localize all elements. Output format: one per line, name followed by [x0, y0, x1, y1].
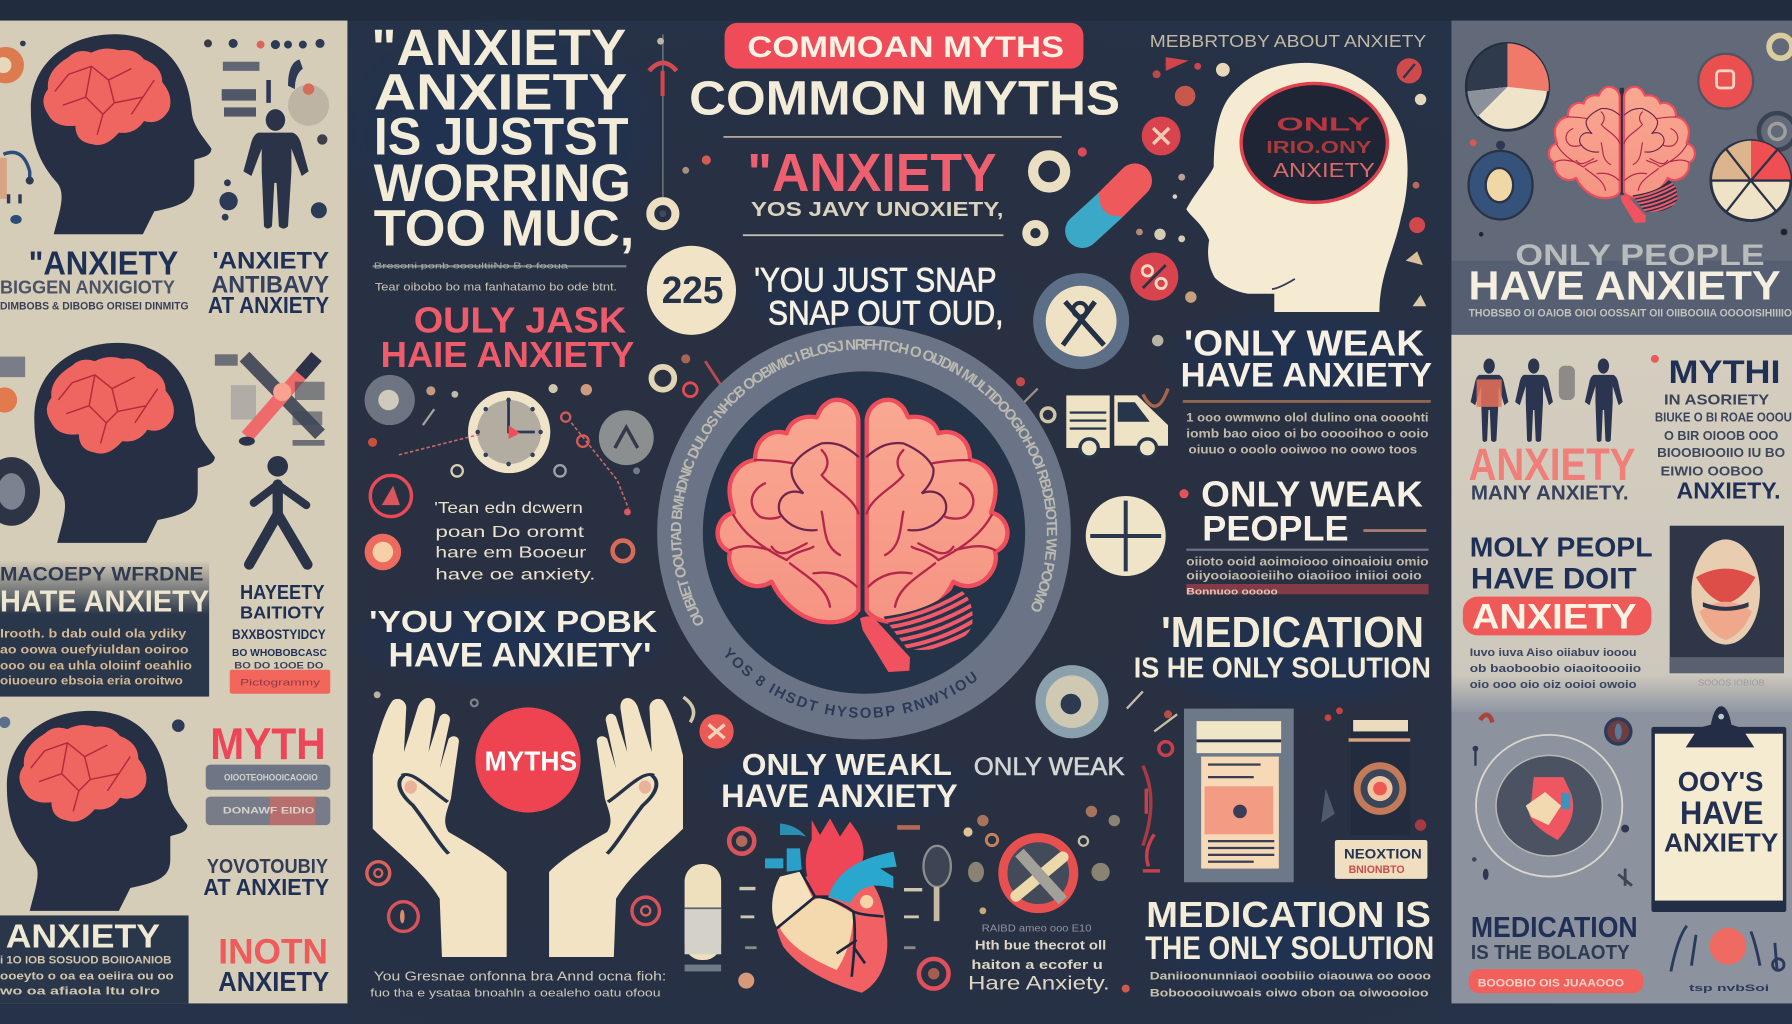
- icon: thread medallion: [649, 34, 677, 226]
- heading: medication is the only solution 2: [1145, 894, 1434, 966]
- heading: only weak people: PEOPLE: [1202, 509, 1349, 549]
- text: you can decern: hare em Booeur: [435, 545, 587, 562]
- heading: only weak small: ONLY WEAK: [974, 753, 1125, 781]
- caption: bottom of hands: [370, 970, 666, 1000]
- text: you at anxiety: [203, 855, 329, 900]
- text: anxiety block 1: [0, 245, 189, 313]
- text: mythi block: O BIR OIOOB OOO: [1664, 429, 1779, 443]
- heading: medication is the only solution 1: IS HE ONLY SOLUTION: [1134, 653, 1431, 685]
- section: beige gradient to gray: [1451, 335, 1792, 1003]
- box: anxiety bottom: i 1O IOB SOSUOD BOIIOANIOB: [0, 954, 171, 966]
- heading: only weak have anxiety centre: ONLY WEAKL: [742, 747, 952, 782]
- icon: cream head with dark brain: [1186, 63, 1408, 312]
- box: hate anxiety: ao oowa ouefyiuldan ooiroo: [0, 643, 189, 657]
- text: mythi block: MYTHI: [1669, 354, 1781, 390]
- bars: grey labels: [206, 765, 330, 825]
- panel: medication leaflet: [1184, 709, 1294, 882]
- panel: right column: [1451, 21, 1792, 1003]
- text: not anxiety: INOTN: [218, 931, 328, 971]
- text: anxiety red gradient: MANY ANXIETY.: [1471, 481, 1629, 504]
- caption: under headline: Tear oibobo bo ma fanhatamo bo ode btnt.: [375, 281, 617, 293]
- ring lettering: YOS 8 IHSDT HYSOBP RNWYIOU: [725, 647, 976, 718]
- caption: under headline: [373, 262, 626, 293]
- heading: medication is the only solution 1: [1134, 609, 1431, 685]
- heading: you just snap: [754, 261, 1003, 333]
- text: anxiety block 1: DIMBOBS & DIBOBG ORISEI DINMITG: [0, 301, 189, 313]
- text: myth: MYTH: [210, 720, 326, 769]
- tag: red label: [230, 661, 330, 694]
- icon: blue medal: [1469, 139, 1787, 237]
- headline: red only ask: [381, 300, 634, 375]
- text: have anxiety caption: [968, 923, 1110, 995]
- text: moly people: HAVE DOIT: [1471, 563, 1637, 596]
- text: moly people: [1470, 532, 1653, 596]
- text: medication is the solution: [1471, 912, 1638, 964]
- caption: moly people: ob baoboobio oiaoitoooiio: [1470, 663, 1641, 675]
- heading: medication is the only solution 1: 'MEDICATION: [1161, 609, 1424, 657]
- heading: only people: ONLY PEOPLE: [1515, 239, 1765, 272]
- section: gray top: [1451, 21, 1792, 335]
- headline: anxiety is just worrying too much: "ANXIETY: [371, 18, 626, 76]
- icon: medical capsule: [685, 864, 721, 971]
- text: anxiety block 2: 'ANXIETY: [213, 248, 329, 275]
- icons: top right of left column: [204, 39, 329, 221]
- headline: anxiety is just worrying too much: TOO MUC,: [374, 199, 634, 257]
- text: medication is the solution: IS THE BOLAOTY: [1471, 941, 1630, 964]
- text: not anxiety: [218, 931, 329, 997]
- text: myth column 1: BAITIOTY: [240, 602, 325, 622]
- caption: moly people: oio ooo oio oiz ooioi owoio: [1470, 679, 1637, 691]
- divider: [723, 136, 1062, 138]
- heading: only weak have anxiety centre: HAVE ANXIETY: [721, 778, 958, 814]
- icon: bottom right cluster: tsp nvbSoi: [1689, 983, 1769, 993]
- box: anxiety bottom: wo oa afiaola ltu olro: [0, 985, 160, 997]
- icon: bottom right cluster: [1671, 926, 1784, 993]
- heading: have anxiety: HAVE ANXIETY: [1469, 262, 1781, 308]
- text: anxiety red gradient: ANXIETY: [1469, 439, 1635, 490]
- text: myth column 1: BXXBOSTYIDCY: [232, 627, 326, 643]
- text: you can decern: [434, 500, 595, 583]
- label: medication card: BNIONBTO: [1349, 864, 1405, 876]
- caption: moly people: [1470, 647, 1641, 691]
- icon: clipboard: ANXIETY: [1664, 827, 1779, 857]
- text: myth column 1: [232, 581, 327, 659]
- text: anxiety block 2: [208, 248, 329, 318]
- text: you can decern: 'Tean edn dcwern: [434, 500, 583, 517]
- head with brain 1: [31, 34, 211, 234]
- label: medication card: [1335, 840, 1427, 879]
- navy glows behind headlines: [331, 11, 1454, 1006]
- icon: delivery truck: [1066, 395, 1168, 457]
- text: medication is the solution: MEDICATION: [1471, 912, 1638, 944]
- icons: around heart: [729, 825, 951, 989]
- icon: red badge: [1698, 54, 1753, 109]
- icon: bottle with target: [1349, 720, 1410, 835]
- icon: anatomical heart: [765, 818, 897, 993]
- box: hate anxiety: MACOEPY WFRDNE: [0, 564, 203, 586]
- figure: walking person: [249, 456, 307, 565]
- heading: memory about anxiety: MEBBRTOBY ABOUT ANXIETY: [1150, 31, 1427, 51]
- icon: cupped hands with myths: [373, 698, 683, 957]
- caption block: medication: Daniioonunniaoi ooobiiio oiaouwa oo oooo: [1150, 970, 1431, 982]
- box: anxiety bottom: [0, 915, 189, 1003]
- headline: you have anxiety: 'YOU YOIX POBK: [369, 604, 657, 639]
- text: you can decern: poan Do oromt: [435, 524, 585, 541]
- headline: you have anxiety: [369, 604, 657, 674]
- badge: 225: [647, 246, 736, 335]
- text: mythi block: IN ASORIETY: [1664, 393, 1769, 409]
- text: anxiety block 1: BIGGEN ANXIGIOTY: [0, 277, 175, 298]
- caption block: only weak: iomb bao oioo oi bo ooooihoo o ooio: [1186, 427, 1429, 441]
- icon: small rings top right: [1759, 35, 1792, 150]
- caption block: people: oiiyooiaooieiiho oiaoiioo iniioi ooio: [1186, 568, 1422, 582]
- text: mythi block: EIWIO OOBOO: [1661, 464, 1764, 478]
- text: mythi block: ANXIETY.: [1677, 477, 1781, 503]
- caption block: people: [1186, 549, 1429, 596]
- text: anxiety block 2: ANTIBAVY: [211, 272, 329, 299]
- icon: clipboard: [1651, 706, 1786, 912]
- box: anxiety bottom: ANXIETY: [6, 918, 160, 955]
- heading: only weak have anxiety centre: [721, 747, 958, 814]
- tag: red label: BO DO 1OOE DO: [234, 661, 323, 671]
- pill: bottom red: [1469, 969, 1643, 993]
- text: you at anxiety: AT ANXIETY: [203, 874, 329, 900]
- picture: dark frame with egg: SOOOS IOBIOB: [1698, 679, 1765, 688]
- box: hate anxiety: oiuoeuro ebsoia eria oroitwo: [0, 674, 183, 688]
- text: anxiety red gradient: [1469, 439, 1635, 504]
- head with brain 2: [34, 343, 215, 543]
- icons: around no sign: [963, 789, 1160, 993]
- text: anxiety block 1: "ANXIETY: [29, 245, 178, 282]
- caption block: medication: Bobooooiuwoais oiwo obon oa oiwoooioo: [1150, 988, 1429, 1000]
- caption: bottom of hands: You Gresnae onfonna bra Annd ocna fioh:: [374, 970, 666, 984]
- headline: anxiety is just worrying too much: [371, 18, 634, 257]
- title: common myths: COMMON MYTHS: [689, 72, 1120, 125]
- headline: red only ask: HAIE ANXIETY: [381, 334, 634, 375]
- heading: only weak have anxiety right: [1181, 322, 1432, 394]
- box: hate anxiety: ooo ou ea uhla oloiinf oeahlio: [0, 659, 192, 673]
- icon: gray medallion: [1035, 665, 1177, 738]
- icons: around head: [1153, 57, 1426, 306]
- bars: grey labels: DONAWF EIDIO: [223, 806, 314, 816]
- pill: header label: COMMOAN MYTHS: [747, 31, 1064, 64]
- panel: left beige column: [0, 21, 347, 1003]
- caption: bottom of hands: fuo tha e ysataa bnoahln a oealeho oatu ofoou: [370, 988, 661, 1000]
- caption block: only weak: oiuuo o ooolo ooiwoo no oowo toos: [1189, 443, 1417, 457]
- box: hate anxiety: [0, 560, 210, 697]
- box: hate anxiety: Irooth. b dab ould ola ydiky: [0, 627, 187, 641]
- text: myth column 1: BO WHOBOBCASC: [232, 648, 327, 659]
- headline: anxiety is just worrying too much: ANXIETY: [374, 63, 627, 121]
- ring: around brain: [657, 326, 1071, 740]
- divider: [743, 234, 1003, 236]
- box: anxiety bottom: ooeyto o oa ea oeiira ou oo: [0, 970, 174, 982]
- icon: cream head with dark brain: ANXIETY: [1273, 159, 1375, 182]
- text: mythi block: [1651, 354, 1792, 503]
- icons: around center top: [651, 117, 1185, 422]
- icon: crossed X: [215, 354, 325, 446]
- ring lettering: OUBIET OOUTAD BMHDNIC DULOS NHCB OOBIMIC I BLOSJ NRFHTCH O OIJDIN MULTIDOOGIOHOOI RBDEIOTE WE POOMO: [670, 339, 1058, 626]
- headline: you have anxiety: HAVE ANXIETY': [389, 636, 651, 674]
- icon: cream head with dark brain: IRIO.ONY: [1266, 137, 1372, 157]
- text: have anxiety caption: RAIBD ameo ooo E10: [982, 923, 1092, 934]
- headline: anxiety is just worrying too much: WORRING: [374, 154, 631, 213]
- illustration: brain in right column: [1549, 87, 1695, 223]
- caption: under headline: Bresoni ponb oooultiiNo B o fooua: [374, 262, 569, 271]
- heading: only weak have anxiety right: HAVE ANXIETY: [1181, 356, 1432, 394]
- icon: crossed tool badge: [1033, 273, 1129, 369]
- heading: only weak people: ONLY WEAK: [1201, 473, 1423, 514]
- caption block: people: Bonnuoo ooooo: [1186, 586, 1278, 596]
- text: have anxiety caption: haiton a ecofer u: [971, 958, 1103, 972]
- text: you at anxiety: YOVOTOUBIY: [207, 855, 328, 878]
- pill: header label: [725, 23, 1083, 69]
- caption block: people: oiioto ooid aoimoiooo oinoaioiu omio: [1186, 555, 1429, 569]
- top dark strip: [0, 0, 1792, 21]
- tag: red label: Pictogrammy: [240, 678, 321, 688]
- icons: rings around hands: [367, 691, 734, 931]
- icon: heart in ring: [1476, 735, 1622, 877]
- text: myth column 1: HAYEETY: [240, 581, 325, 604]
- text: have anxiety caption: Hare Anxiety.: [968, 973, 1110, 995]
- text: anxiety block 2: AT ANXIETY: [208, 292, 329, 318]
- headline: anxiety is just worrying too much: IS JUSTST: [374, 107, 629, 166]
- icons: around clock: [365, 375, 654, 570]
- caption: moly people: Iuvo iuva Aiso oiiabuv iooou: [1470, 647, 1637, 659]
- icon: clipboard: HAVE: [1680, 795, 1763, 831]
- icons: left edge of left column: [0, 41, 185, 732]
- caption block: medication: [1150, 970, 1431, 1000]
- text: moly people: MOLY PEOPL: [1470, 532, 1653, 563]
- heading: red anxiety: "ANXIETY: [747, 143, 997, 203]
- heading: only weak have anxiety right: 'ONLY WEAK: [1184, 322, 1425, 363]
- label: medication card: NEOXTION: [1344, 846, 1422, 861]
- caption block: only weak: 1 ooo owmwno olol dulino ona oooohti: [1186, 411, 1429, 425]
- pill: bottom red: BOOOBIO OIS JUAAOOO: [1478, 977, 1624, 989]
- heading: you just snap: SNAP OUT OUD,: [768, 295, 1003, 333]
- figure: standing person: [243, 109, 309, 229]
- icon: no bandage sign: [1003, 838, 1074, 909]
- pill: anxiety: ANXIETY: [1472, 597, 1637, 637]
- icons: around heart ring: [1472, 715, 1632, 886]
- chart: pie 1: [1466, 43, 1549, 130]
- subheading: you just anxiety: YOS JAVY UNOXIETY,: [751, 198, 1003, 221]
- icon: clipboard: OOY'S: [1678, 766, 1763, 797]
- headline: red only ask: OULY JASK: [414, 300, 627, 341]
- caption block: only weak: [1183, 400, 1431, 457]
- heading: medication is the only solution 2: MEDICATION IS: [1146, 894, 1431, 935]
- text: you can decern: have oe anxiety.: [435, 566, 595, 583]
- icons: medication decorations: [1143, 707, 1426, 846]
- icon: plus circle: [1086, 496, 1166, 576]
- icon: capsule: [1082, 181, 1135, 231]
- bars: grey labels: OIOOTEOHOOICAOOIO: [224, 773, 318, 783]
- heading: medication is the only solution 2: THE ONLY SOLUTION: [1145, 930, 1434, 966]
- box: hate anxiety: HATE ANXIETY: [0, 583, 210, 618]
- icon: clock: [468, 391, 550, 473]
- icon: cream head with dark brain: ONLY: [1277, 113, 1370, 134]
- badge: 225: 225: [662, 269, 723, 311]
- text: mythi block: BIOOBIOOIIO IU BO: [1657, 446, 1785, 460]
- picture: dark frame with egg: [1670, 526, 1784, 688]
- icon: cupped hands with myths: MYTHS: [485, 745, 577, 776]
- heading: you just snap: 'YOU JUST SNAP: [754, 261, 997, 299]
- text: not anxiety: ANXIETY: [218, 966, 329, 997]
- text: have anxiety caption: Hth bue thecrot oll: [975, 939, 1106, 953]
- chart: pie 2: [1711, 141, 1791, 221]
- heading: only weak people: [1179, 473, 1426, 549]
- head with brain 3: [7, 711, 187, 911]
- brain illustration: [718, 400, 1007, 672]
- figures: group of people: [1471, 358, 1623, 442]
